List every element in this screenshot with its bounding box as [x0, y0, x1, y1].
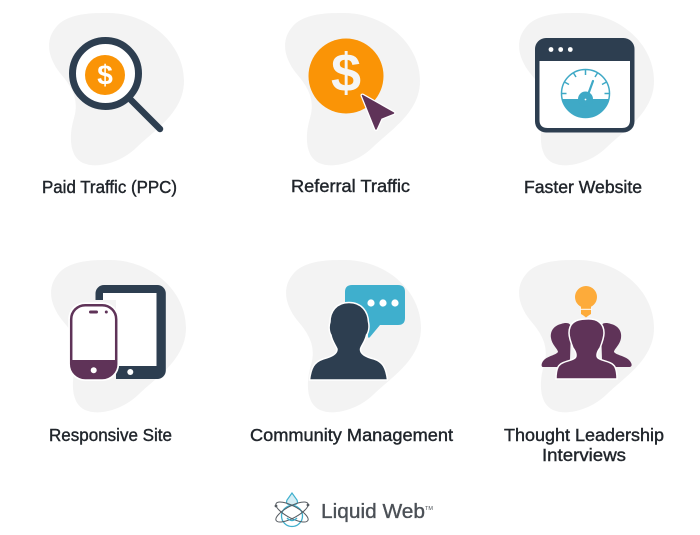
- background blob: [285, 13, 420, 165]
- label: Paid Traffic (PPC): Paid Traffic (PPC): [42, 177, 177, 197]
- icon: magnifier with dollar: $: [97, 60, 113, 90]
- icon: dollar coin with cursor: [308, 38, 394, 129]
- background blob: [286, 260, 421, 412]
- logo: Liquid Web: [273, 493, 433, 526]
- icon: tablet and phone: [71, 285, 166, 382]
- icon: logo droplet and orbits: [273, 493, 311, 526]
- label: Faster Website: Faster Website: [524, 177, 642, 197]
- icon: dollar coin with cursor: $: [331, 43, 361, 103]
- background blob: [51, 260, 186, 412]
- label: Community Management: Community Management: [250, 425, 453, 445]
- panel: referral traffic: [285, 13, 420, 196]
- panel: responsive site: [49, 260, 186, 445]
- trademark: TM: [425, 506, 433, 512]
- background blob: [49, 13, 184, 165]
- label: Referral Traffic: Referral Traffic: [291, 176, 410, 196]
- background blob: [519, 13, 654, 165]
- icon: person with speech bubble: [310, 285, 405, 380]
- panel: paid traffic: [42, 13, 184, 197]
- icon: magnifier with dollar: [72, 40, 160, 129]
- panel: thought leadership: [504, 260, 664, 465]
- background blob: [519, 260, 654, 412]
- icon: browser window with gauge: [535, 38, 634, 132]
- panel: faster website: [519, 13, 654, 197]
- label: Thought Leadership Interviews: [504, 425, 664, 465]
- label: Thought Leadership Interviews: Interviews: [542, 445, 626, 465]
- panel: community management: [250, 260, 453, 445]
- icon: group with light bulb: [542, 286, 632, 379]
- label: Thought Leadership Interviews: Thought Leadership: [504, 425, 664, 445]
- label: Responsive Site: Responsive Site: [49, 425, 172, 445]
- logo wordmark: Liquid Web: [321, 501, 425, 523]
